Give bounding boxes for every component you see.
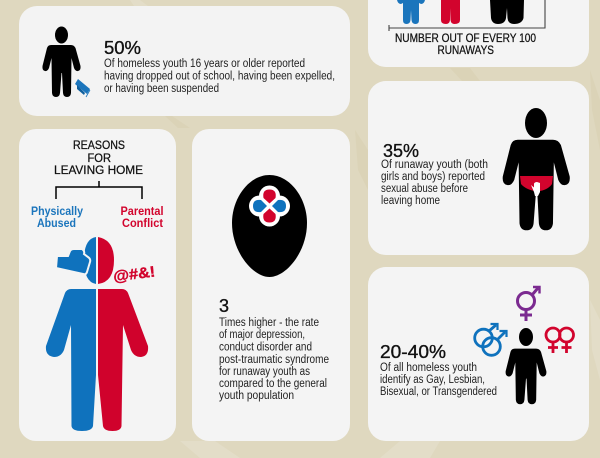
label: physically abused: Abused (37, 216, 76, 230)
panel: LGBT youth (368, 267, 589, 441)
panel: sexual abuse (368, 81, 589, 255)
label: physically abused: Physically (31, 204, 83, 218)
text: LGBT description (380, 362, 497, 398)
text: mental health description (219, 317, 329, 402)
label: parental conflict: Conflict (122, 216, 163, 230)
text: dropout description: having dropped out of school, having been expelled, (104, 70, 335, 82)
text: mental health description: Times higher - the rate (219, 317, 319, 329)
text: LGBT description: Bisexual, or Transgendered (380, 386, 497, 398)
icon: female couple symbol (546, 328, 574, 353)
icon: graduation cap (75, 79, 90, 97)
text: mental health description: compared to the general (219, 378, 327, 390)
text: swearing: @#&! (112, 263, 156, 285)
icon: red figure (441, 0, 460, 24)
text: abuse description: girls and boys) reported (381, 171, 485, 183)
heading: LEAVING HOME (54, 165, 143, 177)
statistic: 3: 3 (219, 296, 229, 316)
text: mental health description: post-traumatic syndrome (219, 354, 329, 366)
bracket (56, 181, 142, 199)
text: dropout description: Of homeless youth 16 years or older reported (104, 58, 305, 70)
text: mental health description: for runaway youth as (219, 366, 310, 378)
text: abuse description: leaving home (381, 195, 440, 207)
statistic: 35%: 35% (383, 141, 419, 161)
icon: male couple symbol (475, 324, 506, 355)
panel: mental health (192, 129, 350, 441)
text: LGBT description: Of all homeless youth (380, 362, 477, 374)
heading: FOR (88, 153, 111, 165)
icon: blue figure (397, 0, 425, 24)
icon: black figure (490, 0, 524, 24)
text: mental health description: of major depression, (219, 329, 305, 341)
label: physically abused (31, 204, 83, 230)
label: parental conflict (120, 204, 164, 230)
chart caption (395, 33, 536, 57)
text: abuse description: sexual abuse before (381, 183, 468, 195)
figure: red half (98, 237, 148, 431)
icon: person with shorts (503, 108, 570, 230)
statistic: 50%: 50% (104, 38, 141, 58)
chart caption: NUMBER OUT OF EVERY 100 (395, 33, 536, 45)
text: abuse description: Of runaway youth (both (381, 159, 488, 171)
text: mental health description: conduct disorder and (219, 342, 312, 354)
figure: blue half (46, 237, 96, 431)
icon: person (506, 328, 546, 404)
text: dropout description: or having been suspended (104, 83, 219, 95)
chart axis (389, 0, 545, 31)
text: mental health description: youth population (219, 390, 294, 402)
text: dropout description (104, 58, 335, 95)
icon: head with flower (232, 175, 307, 277)
icon: transgender symbol (518, 287, 540, 321)
panel: runaways count (368, 0, 589, 67)
text: abuse description (381, 159, 488, 207)
statistic: 20-40%: 20-40% (380, 342, 446, 362)
panel: dropout (19, 6, 350, 116)
icon: person (42, 26, 81, 97)
chart caption: RUNAWAYS (438, 45, 494, 57)
heading: REASONS (73, 140, 125, 152)
text: LGBT description: identify as Gay, Lesbian, (380, 374, 485, 386)
heading (54, 140, 143, 177)
label: parental conflict: Parental (120, 204, 164, 218)
panel: reasons for leaving home (19, 129, 176, 441)
icon: fist (56, 249, 90, 274)
